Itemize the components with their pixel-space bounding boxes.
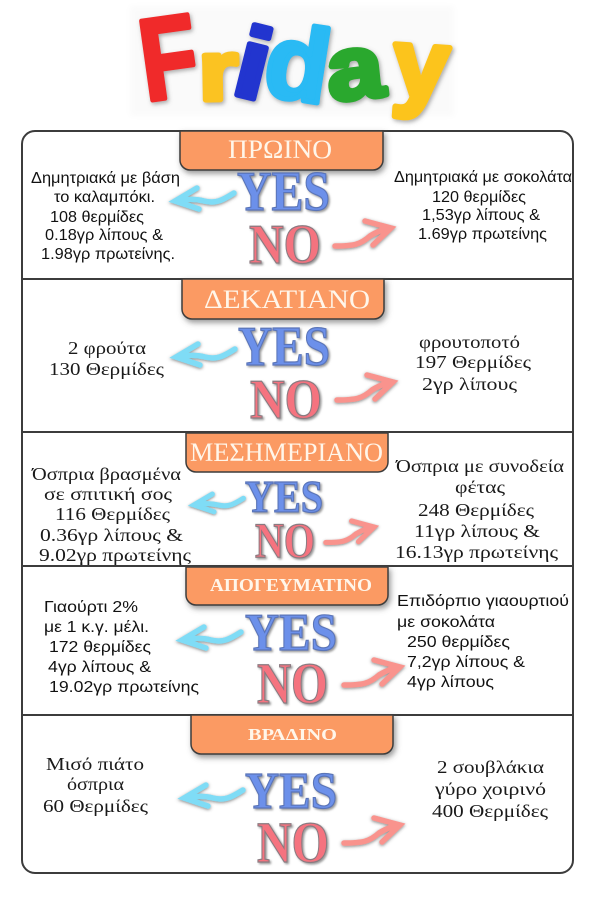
divider [22,565,573,567]
text: yes option: 2 φρούτα [68,338,146,358]
text: yes option: Δημητριακά με βάση [31,170,180,187]
text: no option: 7,2γρ λίπους & [407,654,526,671]
label: NO: NO [250,369,322,431]
text: yes option: με 1 κ.γ. μέλι. [44,619,149,636]
text: no option [432,757,548,821]
text: yes option: 172 θερμίδες [49,639,151,656]
text: yes option: σε σπιτική σος [44,484,172,504]
divider [22,714,573,716]
arrow: blue left [176,344,235,365]
text: yes option: το καλαμπόκι. [54,189,155,206]
title: Friday: y [389,8,453,122]
arrow: blue left [194,494,243,512]
text: no option [415,332,531,394]
arrow: pink right [326,521,374,542]
label: NO: NO [249,214,321,276]
header: afternoon: ΑΠΟΓΕΥΜΑΤΙΝΟ [210,575,372,595]
text: no option: Δημητριακά με σοκολάτα [394,169,572,186]
header: morning [180,131,383,170]
header: dinner: ΒΡΑΔΙΝΟ [248,725,337,744]
text: yes option: 108 θερμίδες [50,209,144,226]
text: yes option: 130 Θερμίδες [49,359,164,379]
text: yes option [43,754,148,816]
text: yes option [49,338,164,379]
text: no option [394,169,572,243]
text: no option: 250 θερμίδες [407,634,510,651]
text: yes option [31,170,180,263]
arrow: pink right [344,818,400,843]
text: yes option: Μισό πιάτο [46,754,144,774]
text: no option: 1.69γρ πρωτείνης [418,226,547,243]
text: no option: 120 θερμίδες [432,189,526,206]
panel: mid-morning snack [49,279,531,431]
text: no option: 248 Θερμίδες [418,500,534,520]
label: NO: NO [257,651,328,716]
text: no option: 1,53γρ λίπους & [422,207,541,224]
header: lunch: ΜΕΣΗΜΕΡΙΑΝΟ [190,438,383,467]
header: morning: ΠΡΩΙΝΟ [228,135,332,164]
label: NO: NO [255,512,315,568]
arrow: pink right [344,660,400,685]
text: no option: 2γρ λίπους [422,374,517,394]
label: YES: YES [238,316,330,378]
text: yes option: 9.02γρ πρωτείνης [39,545,191,565]
title: Friday: d [257,2,338,127]
title: Friday: a [322,16,389,121]
text: yes option: 4γρ λίπους & [48,659,152,676]
divider [22,431,573,433]
arrow: blue left [184,785,243,806]
text: yes option [44,599,199,696]
label: NO: NO [257,810,329,875]
main frame [22,131,573,873]
text: yes option: 116 Θερμίδες [55,504,170,524]
text: no option: με σοκολάτα [397,614,495,631]
header: snack: ΔΕΚΑΤΙΑΝΟ [204,285,370,314]
text: no option: 2 σουβλάκια [437,757,544,777]
label: YES: YES [245,763,337,820]
header: snack [182,279,384,319]
text: yes option: 60 Θερμίδες [43,796,148,816]
panel: morning [31,131,572,276]
arrow: blue left [175,188,234,209]
text: no option: Όσπρια με συνοδεία [395,456,564,476]
title: Friday: i [224,6,283,122]
divider [22,278,573,280]
label: YES: YES [245,472,323,522]
text: no option: 11γρ λίπους & [414,521,540,541]
text: yes option: 19.02γρ πρωτείνης [49,679,199,696]
text: yes option: Γιαούρτι 2% [44,599,138,616]
title: Friday [130,0,454,127]
arrow: pink right [337,375,393,400]
label: YES: YES [245,604,337,662]
panel: lunch [31,433,564,568]
text: no option: φέτας [455,477,505,497]
arrow: pink right [335,221,391,246]
text: no option: φρουτοποτό [419,332,520,352]
text: no option: 4γρ λίπους [407,674,494,691]
text: no option: 400 Θερμίδες [432,801,548,821]
label: YES: YES [237,161,330,223]
header: dinner [191,715,393,754]
text: yes option: 1.98γρ πρωτείνης. [41,246,175,263]
text: no option [397,593,569,691]
text: no option: γύρο χοιρινό [434,779,546,799]
text: yes option: 0.36γρ λίπους & [40,525,183,545]
text: no option: 197 Θερμίδες [415,352,531,372]
arrow: blue left [182,627,241,648]
text: no option: Επιδόρπιο γιαουρτιού [397,593,569,610]
text: no option [395,456,564,562]
panel: dinner [43,715,548,875]
text: yes option: 0.18γρ λίπους & [45,227,164,244]
text: yes option: όσπρια [67,774,124,794]
title: Friday: r [198,23,239,118]
text: yes option: Όσπρια βρασμένα [31,464,181,484]
header: afternoon [186,567,388,605]
text: yes option [31,464,191,565]
text: no option: 16.13γρ πρωτείνης [395,542,558,562]
panel: afternoon [44,567,569,716]
